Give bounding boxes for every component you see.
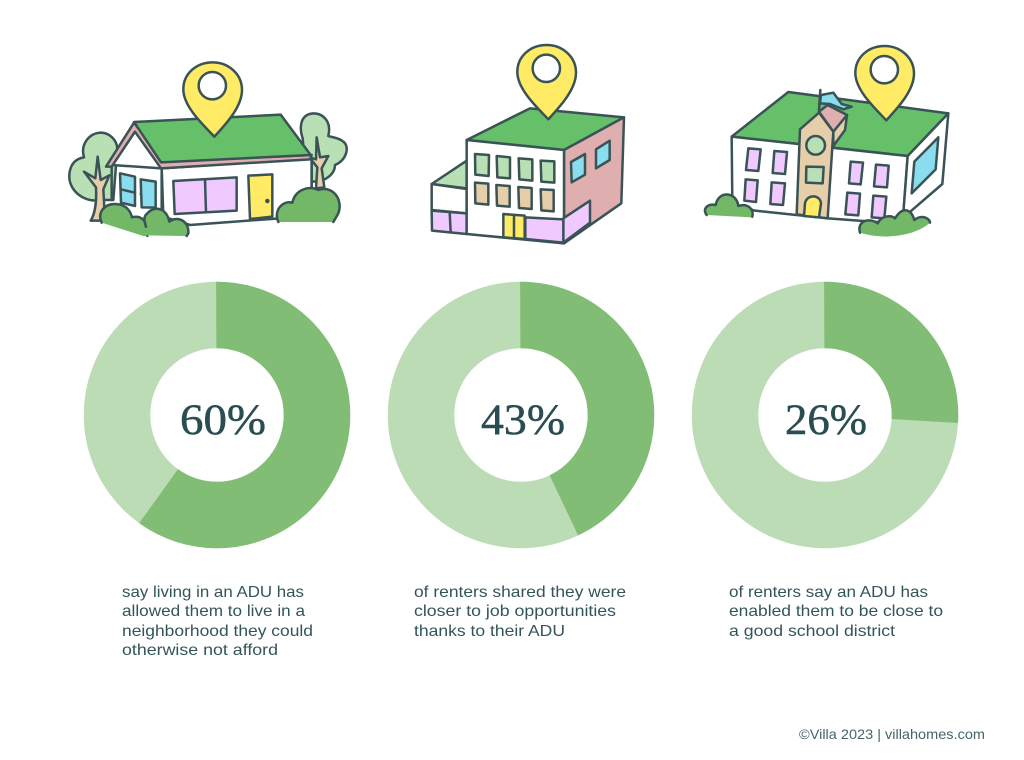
- caption: 60%: [122, 584, 313, 659]
- caption: 43%: of renters shared they were: [414, 584, 626, 601]
- icon: location pin: [183, 62, 242, 137]
- caption: 60%: otherwise not afford: [122, 642, 278, 659]
- caption: 60%: say living in an ADU has: [122, 584, 304, 601]
- caption: 43%: thanks to their ADU: [414, 623, 565, 640]
- icon: house with location pin: [69, 62, 347, 236]
- icon: location pin: [855, 46, 914, 120]
- footer credit: ©Villa 2023 | villahomes.com: [799, 726, 985, 742]
- icon: location pin: [517, 45, 576, 119]
- donut chart: 60%: 60%: [180, 397, 266, 444]
- caption: 43%: closer to job opportunities: [414, 603, 616, 620]
- donut chart: 26%: 26%: [785, 397, 867, 444]
- donut chart: 60%: [117, 315, 317, 515]
- caption: 60%: allowed them to live in a: [122, 603, 305, 620]
- donut chart: 43%: 43%: [481, 397, 565, 444]
- caption: 26%: enabled them to be close to: [729, 603, 943, 620]
- caption: 26%: of renters say an ADU has: [729, 584, 928, 601]
- donut chart: 43%: [421, 315, 621, 515]
- caption: 60%: neighborhood they could: [122, 623, 313, 640]
- icon: school building with location pin: [705, 46, 948, 236]
- caption: 26%: a good school district: [729, 623, 896, 640]
- caption: 26%: [729, 584, 943, 640]
- icon: apartment building with location pin: [432, 45, 624, 243]
- donut chart: 26%: [725, 315, 925, 515]
- caption: 43%: [414, 584, 626, 640]
